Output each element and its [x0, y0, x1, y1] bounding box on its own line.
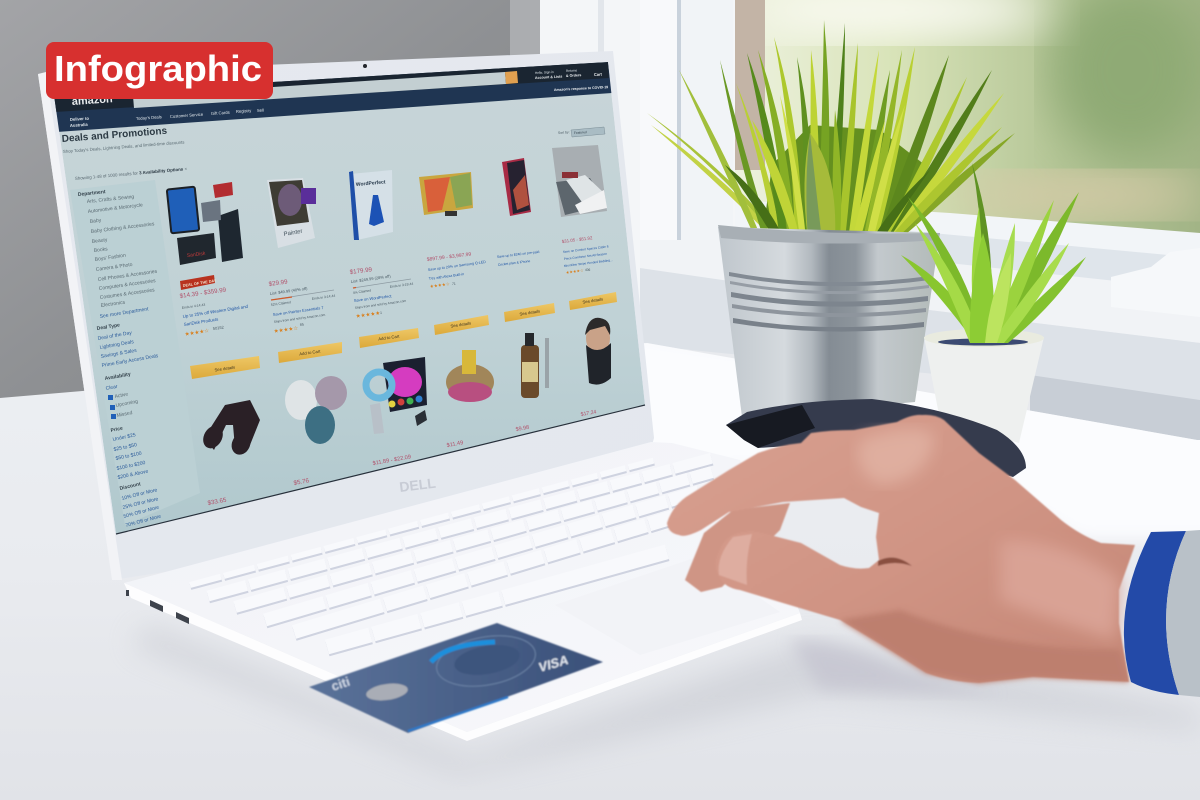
see details and add to cart buttons: See details [450, 320, 471, 329]
product price and description text: DEAL OF THE DAY [183, 279, 217, 288]
credit card [309, 623, 603, 733]
product: oil bottle [521, 333, 549, 398]
screen [54, 62, 645, 534]
sidebar filters: Prime Early Access Deals [101, 353, 159, 369]
sidebar filters: Shop Today's Deals, Lightning Deals, and limited-time discounts [63, 139, 185, 154]
sidebar filters: Discount [119, 481, 142, 492]
product price and description text: List: $49.99 (40% off) [269, 286, 308, 296]
sidebar filters: 70% Off or More [125, 514, 162, 529]
laptop [38, 51, 802, 741]
product price and description text: $14.39 - $359.99 [179, 286, 227, 300]
citi logo: citi [329, 674, 352, 694]
amazon header bar: Customer Service [170, 112, 204, 119]
product: WordPerfect box: WordPerfect [356, 179, 386, 188]
product price and description text: 50152 [212, 324, 225, 331]
sidebar filters: $50 to $100 [115, 451, 142, 462]
amazon header bar: & Orders [566, 73, 581, 78]
product price and description text: Save on Painter Essentials 7 [272, 305, 325, 317]
product price and description text: $33.65 [207, 497, 228, 507]
sidebar filters: $100 to $200 [116, 460, 146, 472]
product price and description text: 406 [585, 268, 591, 272]
product price and description text: $31.05 - $51.92 [562, 235, 593, 244]
sidebar filters: $200 & Above [117, 469, 149, 481]
amazon header bar [54, 62, 612, 132]
hand shape with thumb and index finger [667, 415, 1135, 683]
product: storage drives [167, 182, 243, 265]
laptop base [124, 442, 800, 732]
sidebar filters: Missed [116, 410, 133, 419]
product price and description text: ★★★★★ [355, 310, 381, 320]
product price and description text: SanDisk Products [183, 316, 219, 327]
product price and description text: Ships from and sold by Amazon.com. [274, 313, 326, 324]
lower hand shade [840, 610, 1129, 683]
sidebar filters: Under $25 [112, 432, 136, 443]
see details and add to cart buttons: See details [519, 308, 540, 317]
see details and add to cart buttons: Add to Cart [378, 333, 400, 341]
laptop front edge [124, 583, 802, 741]
thumbnail [719, 534, 752, 585]
background: blurred garden through window [730, 0, 1200, 240]
window frame [510, 0, 1200, 445]
white window latch [1111, 248, 1200, 317]
product price and description text: Piece Comforter Set All Season [564, 252, 607, 261]
skin crease [878, 557, 912, 566]
sidebar filters: Camera & Photo [95, 262, 133, 273]
keyboard keys [190, 457, 712, 649]
background: grey wall [0, 0, 545, 410]
sidebar filters: Price [110, 425, 124, 434]
laptop lid front edge [38, 72, 122, 580]
see details and add to cart buttons [190, 292, 617, 379]
amazon header bar: Hello, Sign in [535, 70, 554, 75]
product price and description text: 1 [380, 311, 382, 315]
sidebar filters: 50% Off or More [123, 505, 160, 520]
sidebar filters: Costumes & Accessories [99, 287, 156, 301]
product: red phone [502, 158, 531, 216]
product price and description text: $897.99 - $3,997.99 [427, 252, 472, 263]
product price and description text: Ships from and sold by Amazon.com [355, 299, 407, 310]
product price and description text: $17.24 [580, 409, 597, 418]
amazon header bar: Returns [566, 68, 578, 73]
product: loofahs [285, 376, 347, 444]
sidebar filters: Deal of the Day [97, 330, 133, 342]
amazon header bar: amazon [71, 93, 113, 108]
product: television [419, 172, 473, 216]
product price and description text: 71 [452, 282, 456, 286]
sidebar filters: See more Department [99, 306, 150, 320]
sort by dropdown [558, 127, 605, 137]
product: WordPerfect box [349, 170, 393, 240]
amazon header bar: Today's Deals [136, 114, 162, 121]
product price and description text: 52% Claimed [271, 300, 291, 307]
product price and description text: $5.76 [293, 477, 310, 487]
amazon header bar: Sell [257, 108, 264, 113]
shadow of laptop and hand on desk [130, 625, 1200, 775]
product: Painter box: Painter [283, 229, 303, 238]
product price and description text: Ends in 4:14:43 [182, 303, 206, 310]
trackpad [555, 556, 780, 655]
product: binoculars [203, 400, 260, 455]
product price and description text: List: $249.99 (28% off) [350, 273, 392, 284]
sidebar filters: $25 to $50 [113, 442, 138, 453]
blue arc on card [431, 642, 495, 662]
sidebar filters: Arts, Crafts & Sewing [87, 194, 135, 205]
side ports [126, 590, 189, 624]
webcam [363, 64, 367, 68]
product price and description text: ★★★★☆ [429, 281, 451, 289]
product price and description text: Cricket plan & iPhone [498, 259, 531, 267]
product price and description text: 4% Claimed [353, 288, 371, 295]
amazon header bar: Amazon's response to COVID-19 [554, 85, 608, 92]
sort by dropdown: Sort by: [558, 130, 570, 135]
product price and description text: $29.99 [268, 278, 289, 288]
amazon header bar: Registry [236, 108, 252, 114]
product price and description text: Save up to 20% on Samsung Q-LED [428, 260, 487, 272]
sidebar filters: Beauty [92, 237, 108, 245]
screen bottom edge [116, 405, 645, 534]
shirt sleeve [1124, 530, 1200, 697]
hand on trackpad [667, 415, 1135, 695]
laptop lid [38, 51, 654, 580]
sidebar filters: Boys' Fashion [94, 253, 126, 263]
sidebar filters: 25% Off or More [122, 496, 159, 511]
card chip [365, 681, 409, 703]
black wallet [726, 399, 1026, 477]
sidebar filters: 10% Off or More [121, 487, 158, 502]
product price and description text: $9.98 [515, 425, 530, 433]
sidebar filters: Upcoming [115, 399, 139, 409]
metal bucket [718, 225, 940, 417]
Visa logo: VISA [537, 652, 570, 675]
knuckle highlight [858, 429, 935, 485]
sidebar filters: Deals and Promotions [61, 126, 168, 145]
sidebar filters: Books [94, 246, 109, 254]
sidebar filters: Savings & Sales [100, 348, 138, 360]
product: LED strip kit [366, 357, 427, 434]
product price and description text: Save on WordPerfect [354, 293, 393, 303]
hand shadow on laptop and desk [790, 640, 1000, 695]
sort by dropdown: Featured [574, 130, 587, 135]
sidebar filters: Department [78, 189, 106, 198]
badge: Infographic [46, 42, 273, 99]
sidebar filters [61, 126, 200, 529]
sidebar filters: Active [114, 391, 129, 400]
product price and description text: $179.99 [349, 266, 373, 276]
product price and description text: TVs with Alexa Built-in [429, 272, 464, 281]
product: Painter box [267, 178, 316, 248]
product: hair ties [446, 350, 494, 402]
product price and description text: Ends in 3:19:44 [390, 282, 414, 289]
product price and description text: ★★★★☆ [184, 327, 210, 338]
see details and add to cart buttons: See details [582, 296, 603, 305]
product price and description text: Microfiber Stripe Hooded Bedding... [564, 258, 613, 268]
amazon header bar: Deliver to [70, 116, 90, 122]
sidebar filters: Clear [105, 384, 118, 392]
see details and add to cart buttons: See details [214, 365, 235, 372]
plant leaves [647, 20, 1015, 240]
sidebar filters: Computers & Accessories [98, 278, 156, 292]
product: man with face mask [585, 318, 611, 385]
amazon header bar: Gift Cards [211, 110, 230, 116]
amazon header bar: Account & Lists [535, 75, 562, 80]
sidebar filters: Lightning Deals [99, 339, 135, 351]
amazon header bar: Australia [70, 122, 89, 128]
product price and description text: ★★★★☆ [273, 325, 299, 335]
product: storage drives: SanDisk [187, 251, 206, 259]
sidebar filters: Deal Type [96, 322, 120, 332]
product price and description text: Save up to $240 on pre-paid [497, 250, 540, 259]
product price and description text: Up to 25% off Western Digital and [182, 304, 249, 319]
sidebar filters: Baby Clothing & Accessories [91, 221, 155, 235]
product: bedding [552, 145, 607, 217]
sidebar filters: Baby [90, 218, 102, 225]
wrist highlight [1000, 540, 1120, 640]
product price and description text: Ends in 3:14:44 [312, 294, 336, 301]
sidebar filters: Automotive & Motorcycle [88, 202, 143, 215]
sidebar filters: Availability [104, 371, 131, 382]
product price and description text: $11.89 - $22.09 [372, 454, 412, 467]
product price and description text [179, 235, 613, 507]
product price and description text: ★★★★☆ [565, 267, 584, 275]
succulent leaves [901, 163, 1086, 343]
plant in metal bucket [647, 20, 1015, 417]
DELL logo: DELL [398, 475, 437, 495]
product price and description text: Save on Comfort Spaces Cable 8 [563, 244, 609, 254]
product price and description text: $11.49 [446, 440, 464, 449]
product price and description text: 85 [300, 322, 304, 327]
badge: Infographic: Infographic [54, 48, 262, 89]
sidebar filters: Electronics [100, 300, 126, 309]
amazon header bar: Cart [594, 72, 603, 77]
white desk [0, 343, 1200, 542]
small succulent in white pot [901, 163, 1086, 443]
middle finger [685, 503, 790, 592]
see details and add to cart buttons: Add to Cart [299, 348, 321, 356]
sidebar filters: Showing 1-48 of 1000 results for 3 Availability Options × [75, 166, 188, 181]
white pot [924, 337, 1044, 443]
sidebar filters: Cell Phones & Accessories [97, 269, 158, 283]
